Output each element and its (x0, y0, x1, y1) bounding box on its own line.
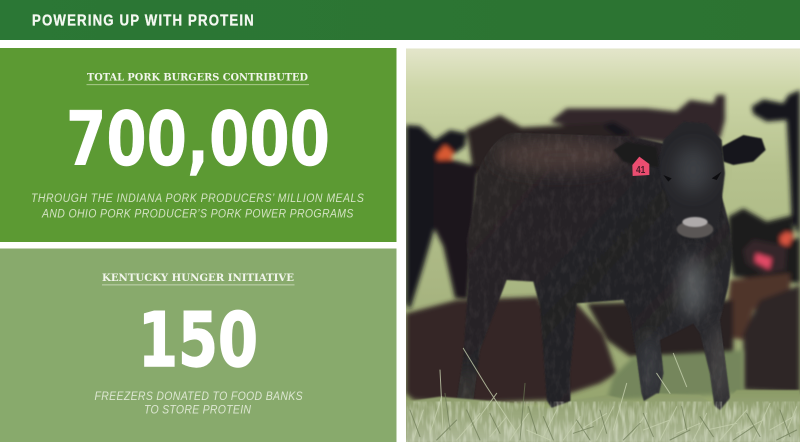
header band (0, 0, 800, 40)
forehead highlight (675, 147, 712, 193)
description: freezers donated (94, 390, 303, 417)
stat: 700,000: 700,000 (66, 95, 330, 183)
ear tag (632, 157, 649, 176)
stat: 150: 150 (138, 296, 258, 384)
left ear (613, 142, 659, 167)
eyes (663, 172, 722, 182)
background herd (406, 90, 800, 393)
main calf (450, 122, 766, 433)
calf body and legs (460, 137, 732, 410)
description: pork programs: AND OHIO PORK PRODUCER’S PORK POWER PROGRAMS (41, 208, 354, 221)
heading: total pork burgers contributed: TOTAL PORK BURGERS CONTRIBUTED (87, 72, 308, 84)
foreground grass (406, 390, 800, 442)
grass blades (410, 348, 797, 440)
description: freezers donated: FREEZERS DONATED TO FOOD BANKS (94, 390, 303, 403)
muzzle (677, 221, 713, 238)
photo: black calf in a herd (406, 48, 800, 442)
description: pork programs: THROUGH THE INDIANA PORK PRODUCERS’ MILLION MEALS (31, 192, 364, 205)
grass texture (406, 402, 800, 442)
mid-ground grass (607, 350, 743, 400)
tag number: 41 (636, 165, 646, 176)
blurred pasture background (406, 48, 800, 442)
calf head (662, 122, 726, 204)
description: freezers donated: TO STORE PROTEIN (144, 404, 252, 417)
fur shading on the calf (450, 130, 737, 433)
description: pork programs (31, 192, 364, 221)
right ear (722, 135, 766, 165)
lying cow, lower left (406, 297, 617, 403)
heading: kentucky hunger initiative: KENTUCKY HUNGER INITIATIVE (102, 272, 294, 284)
nose (682, 217, 708, 227)
panel: kentucky hunger initiative (0, 248, 396, 442)
panel: total pork burgers (0, 48, 396, 242)
title: POWERING UP WITH PROTEIN (32, 13, 254, 30)
